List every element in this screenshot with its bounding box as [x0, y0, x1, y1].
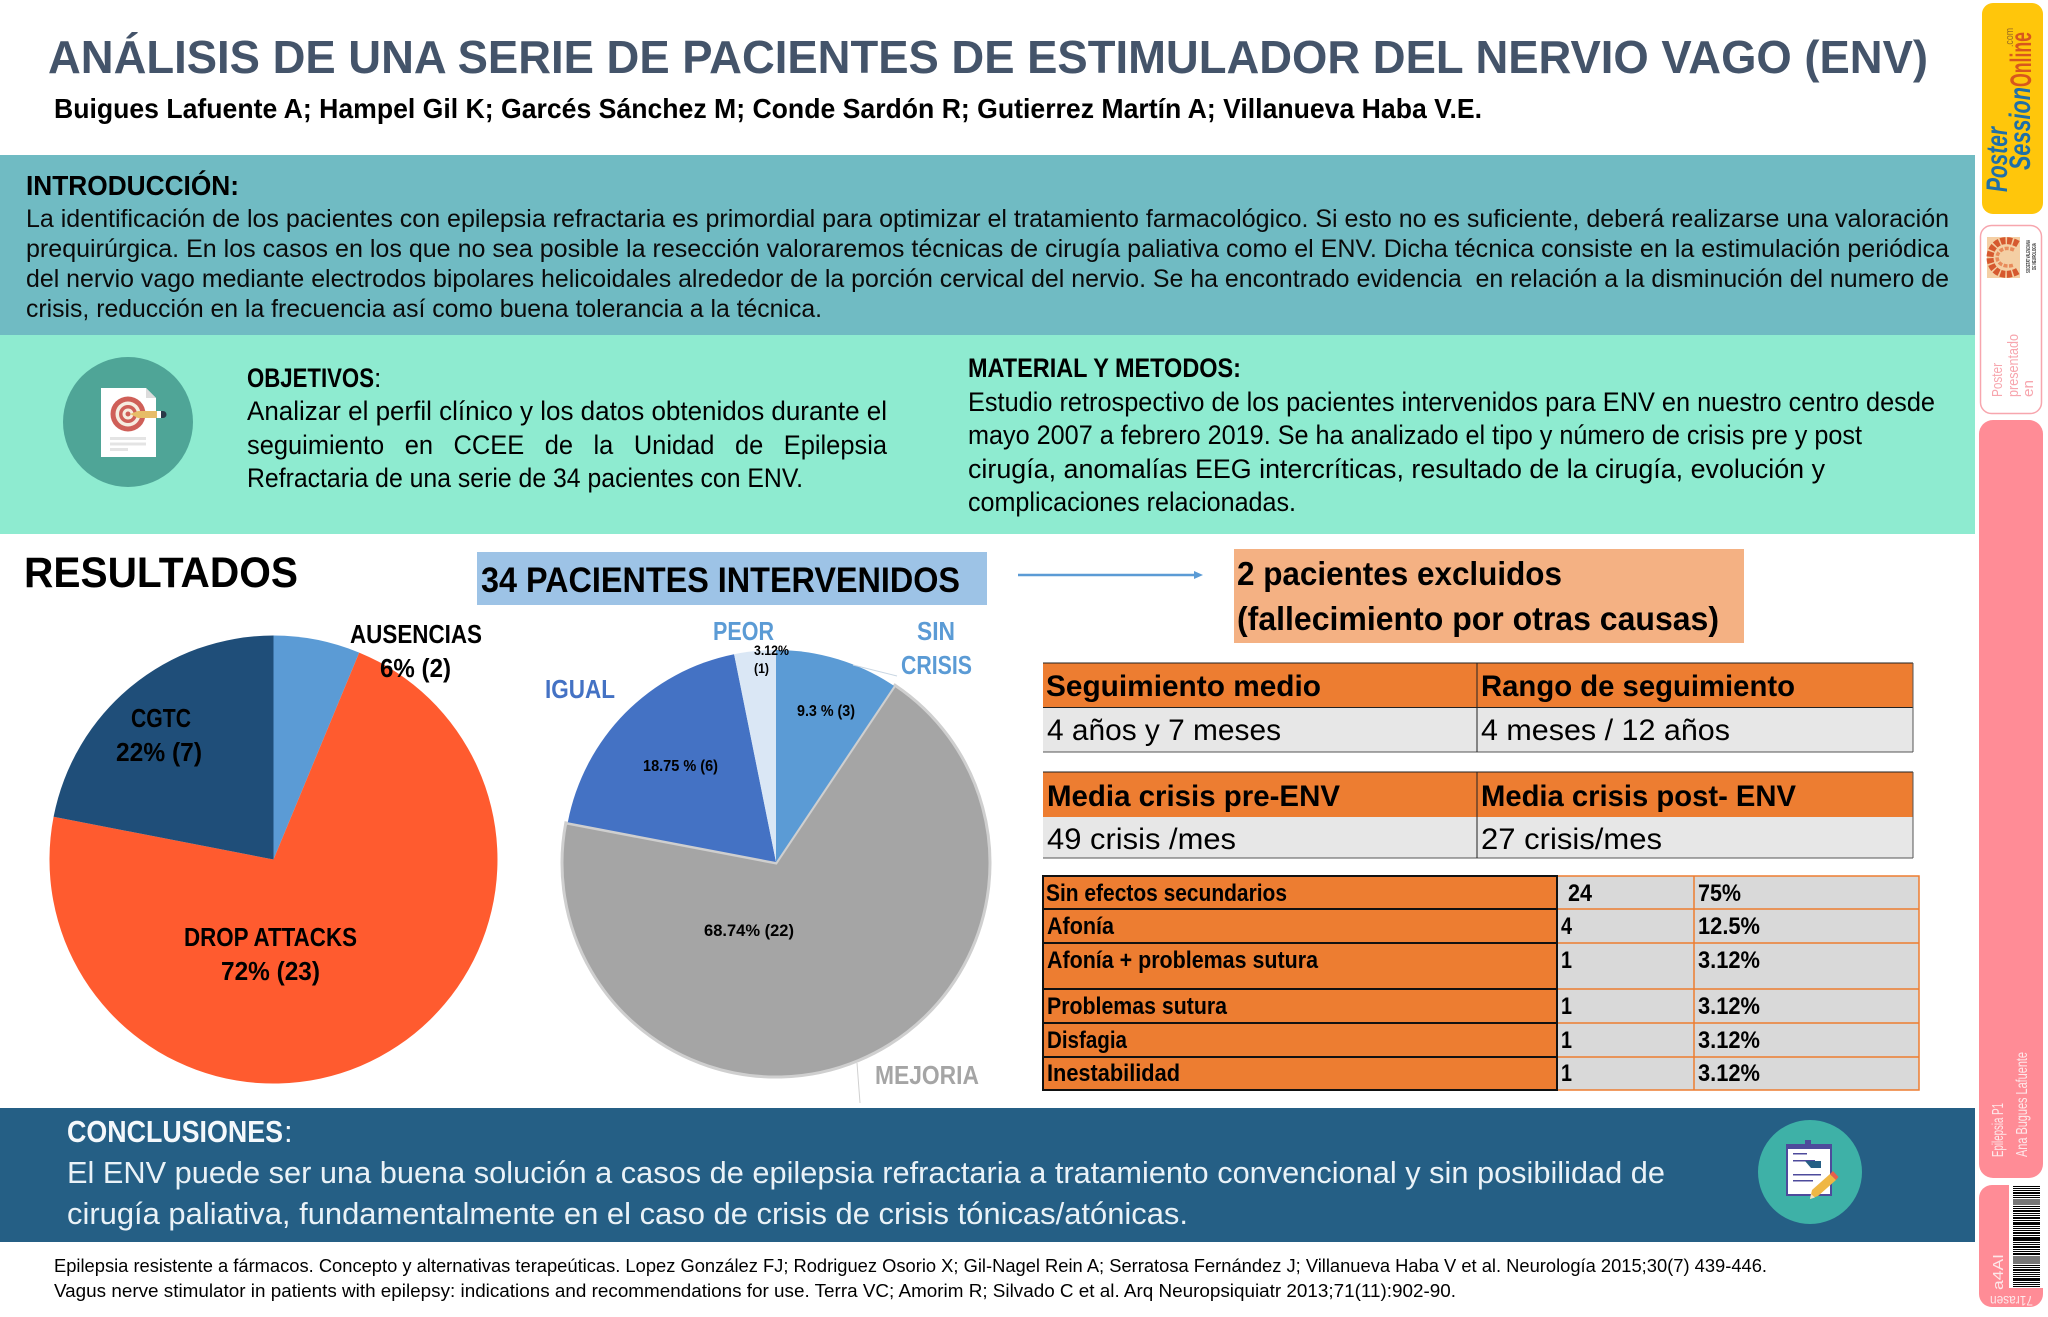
logo: congress brain: SOCIETAT VALENCIANA	[2026, 240, 2032, 273]
text block: material y métodos: cirugía, anomalías EEG intercríticas, resultado de la cirugía, evolución y	[968, 454, 1826, 484]
text block: references: Vagus nerve stimulator in patients with epilepsy: indications and recommendations for use. Terra VC; Amorim R; Silvado C et al. Arq Neuropsiquiatr 2013;71(11):902-90.	[54, 1280, 1456, 1301]
sidebar: poster session online logo: .com	[2004, 28, 2016, 47]
label: peor: PEOR	[713, 616, 774, 646]
arrow	[1018, 571, 1203, 579]
value: peor	[754, 643, 789, 676]
table: efectos secundarios: 75%	[1698, 880, 1741, 907]
table: seguimiento: Seguimiento medio	[1046, 670, 1321, 703]
text block: introducción: del nervio vago mediante electrodos bipolares helicoidales alrededor de la porción cervical del nervio. Se ha encontrado evidencia en relación a la disminución del numero de	[26, 265, 1949, 293]
sidebar: pink author bar: Epilepsia P1	[1990, 1103, 2007, 1157]
table: efectos secundarios: Afonía + problemas sutura	[1047, 947, 1319, 974]
value: sin crisis: 9.3 % (3)	[797, 703, 855, 720]
table: efectos secundarios: 4	[1561, 913, 1573, 940]
text block: objetivos: :	[374, 363, 381, 393]
text block: conclusiones: cirugía paliativa, fundamentalmente en el caso de crisis de crisis tónicas/atónicas.	[67, 1196, 1188, 1231]
table: media de crisis: 27 crisis/mes	[1481, 823, 1662, 856]
table: efectos secundarios: Sin efectos secundarios	[1046, 880, 1287, 907]
text block: material y métodos	[968, 353, 1935, 517]
label: cgtc: CGTC	[131, 705, 191, 733]
title: ANÁLISIS DE UNA SERIE DE PACIENTES DE ESTIMULADOR DEL NERVIO VAGO (ENV)	[48, 31, 1928, 83]
sidebar: poster session online logo	[1981, 3, 2043, 214]
label: ausencias: AUSENCIAS	[350, 621, 482, 649]
callout: pacientes excluidos: (fallecimiento por otras causas)	[1237, 600, 1719, 637]
table: media de crisis: Media crisis post- ENV	[1481, 780, 1796, 813]
table: seguimiento: 4 meses / 12 años	[1481, 714, 1730, 747]
label: poster presentado en: presentado	[2005, 334, 2022, 397]
label: igual: IGUAL	[545, 674, 615, 704]
panel: introducción	[0, 155, 1975, 335]
label: poster presentado en	[1989, 334, 2037, 397]
table: efectos secundarios: 1	[1561, 993, 1572, 1020]
sidebar: pink author bar	[1979, 420, 2043, 1178]
table: efectos secundarios: Problemas sutura	[1047, 993, 1228, 1020]
callout: 34 pacientes intervenidos: 34 PACIENTES INTERVENIDOS	[481, 561, 960, 600]
heading: conclusiones: CONCLUSIONES	[67, 1114, 283, 1149]
text block: objetivos: OBJETIVOS	[247, 363, 374, 393]
text block: objetivos	[247, 363, 887, 493]
table: efectos secundarios: 1	[1561, 1027, 1572, 1054]
label: drop attacks: DROP ATTACKS	[184, 924, 357, 952]
heading: resultados: RESULTADOS	[24, 549, 298, 597]
label: ausencias	[350, 621, 482, 683]
text block: introducción: prequirúrgica. En los casos en los que no sea posible la resección valoraremos técnicas de cirugía paliativa como el ENV. Dicha técnica consiste en la estimulación periódica	[26, 235, 1949, 263]
sidebar: barcode tab	[1979, 1183, 2044, 1309]
text block: conclusiones	[67, 1155, 1665, 1231]
label: sin crisis: SIN	[917, 616, 955, 646]
sidebar: poster session online logo: Session	[2004, 87, 2037, 170]
icon: target document	[63, 357, 193, 487]
table: media de crisis: 49 crisis /mes	[1047, 823, 1236, 856]
text block: objetivos: Refractaria de una serie de 34 pacientes con ENV.	[247, 463, 803, 493]
label: cgtc: 22% (7)	[116, 739, 202, 767]
value: igual: 18.75 % (6)	[643, 758, 718, 775]
label: sin crisis	[901, 616, 972, 680]
text block: material y métodos: mayo 2007 a febrero 2019. Se ha analizado el tipo y número de crisis pre y post	[968, 420, 1863, 450]
text block: conclusiones: El ENV puede ser una buena solución a casos de epilepsia refractaria a tratamiento convencional y sin posibilidad de	[67, 1155, 1665, 1190]
panel: conclusiones	[0, 1108, 1975, 1242]
value: mejoria: 68.74% (22)	[704, 922, 794, 940]
sidebar: barcode tab: 71rasen	[1990, 1293, 2033, 1309]
value: peor: (1)	[754, 661, 769, 676]
text block: objetivos: Analizar el perfil clínico y los datos obtenidos durante el	[247, 396, 887, 426]
sidebar: poster session online logo: Poster	[1981, 125, 2014, 192]
label: ausencias: 6% (2)	[380, 655, 451, 683]
logo: congress brain	[1987, 237, 2038, 278]
text block: references	[54, 1255, 1767, 1301]
callout: pacientes excluidos	[1234, 549, 1744, 643]
table: efectos secundarios: 3.12%	[1698, 947, 1760, 974]
label: poster presentado en: Poster	[1989, 363, 2006, 397]
logo: congress brain: DE NEUROLOGIA	[2032, 243, 2038, 270]
table: media de crisis	[1043, 772, 1913, 858]
text block: material y métodos: MATERIAL Y METODOS:	[968, 353, 1241, 383]
text block: material y métodos: complicaciones relacionadas.	[968, 487, 1296, 517]
table: efectos secundarios: 1	[1561, 1060, 1572, 1087]
callout: pacientes excluidos: 2 pacientes excluidos	[1237, 555, 1562, 592]
table: seguimiento: 4 años y 7 meses	[1047, 714, 1281, 747]
heading: conclusiones: :	[284, 1114, 293, 1149]
table: seguimiento	[1043, 663, 1913, 752]
icon: clipboard	[1758, 1120, 1862, 1224]
table: efectos secundarios: 3.12%	[1698, 993, 1760, 1020]
sidebar: presented at box	[1980, 226, 2042, 414]
table: efectos secundarios	[1043, 876, 1919, 1090]
barcode	[2013, 1186, 2040, 1287]
chart: evolución pie	[545, 616, 990, 1103]
table: efectos secundarios: Inestabilidad	[1047, 1060, 1180, 1087]
label: drop attacks	[184, 924, 357, 986]
chart: tipo de crisis pie	[49, 621, 497, 1084]
label: mejoria: MEJORIA	[875, 1060, 979, 1090]
table: efectos secundarios: Afonía	[1047, 913, 1115, 940]
table: efectos secundarios: 24	[1568, 880, 1593, 907]
authors: Buigues Lafuente A; Hampel Gil K; Garcés Sánchez M; Conde Sardón R; Gutierrez Martín A; Villanueva Haba V.E.	[54, 93, 1482, 124]
sidebar: barcode tab: a4AI	[1990, 1254, 2007, 1290]
text block: introducción: crisis, reducción en la frecuencia así como buena tolerancia a la técnica.	[26, 295, 822, 323]
panel: objetivos y material	[0, 335, 1975, 534]
text block: objetivos: seguimiento en CCEE de la Unidad de Epilepsia	[247, 430, 887, 460]
table: seguimiento: Rango de seguimiento	[1481, 670, 1795, 703]
table: efectos secundarios: 12.5%	[1698, 913, 1760, 940]
table: media de crisis: Media crisis pre-ENV	[1047, 780, 1340, 813]
table: efectos secundarios: Disfagia	[1047, 1027, 1128, 1054]
label: poster presentado en: en	[2020, 380, 2037, 397]
table: efectos secundarios: 3.12%	[1698, 1027, 1760, 1054]
value: peor: 3.12%	[754, 643, 789, 658]
label: cgtc	[116, 705, 202, 767]
table: efectos secundarios: 3.12%	[1698, 1060, 1760, 1087]
text block: material y métodos: Estudio retrospectivo de los pacientes intervenidos para ENV en nuestro centro desde	[968, 387, 1935, 417]
table: efectos secundarios: 1	[1561, 947, 1572, 974]
label: sin crisis: CRISIS	[901, 650, 972, 680]
label: drop attacks: 72% (23)	[221, 958, 320, 986]
text block: references: Epilepsia resistente a fármacos. Concepto y alternativas terapeúticas. Lopez González FJ; Rodriguez Osorio X; Gil-Nagel Rein A; Serratosa Fernández J; Villanueva Haba V et al. Neurología 2015;30(7) 439-446.	[54, 1255, 1767, 1276]
text block: introducción	[26, 205, 1949, 323]
text block: introducción: La identificación de los pacientes con epilepsia refractaria es primordial para optimizar el tratamiento farmacológico. Si esto no es suficiente, deberá realizarse una valoración	[26, 205, 1949, 233]
sidebar: pink author bar: Ana Bugues Lafuente	[2014, 1052, 2031, 1157]
heading: introducción: INTRODUCCIÓN:	[26, 170, 239, 201]
